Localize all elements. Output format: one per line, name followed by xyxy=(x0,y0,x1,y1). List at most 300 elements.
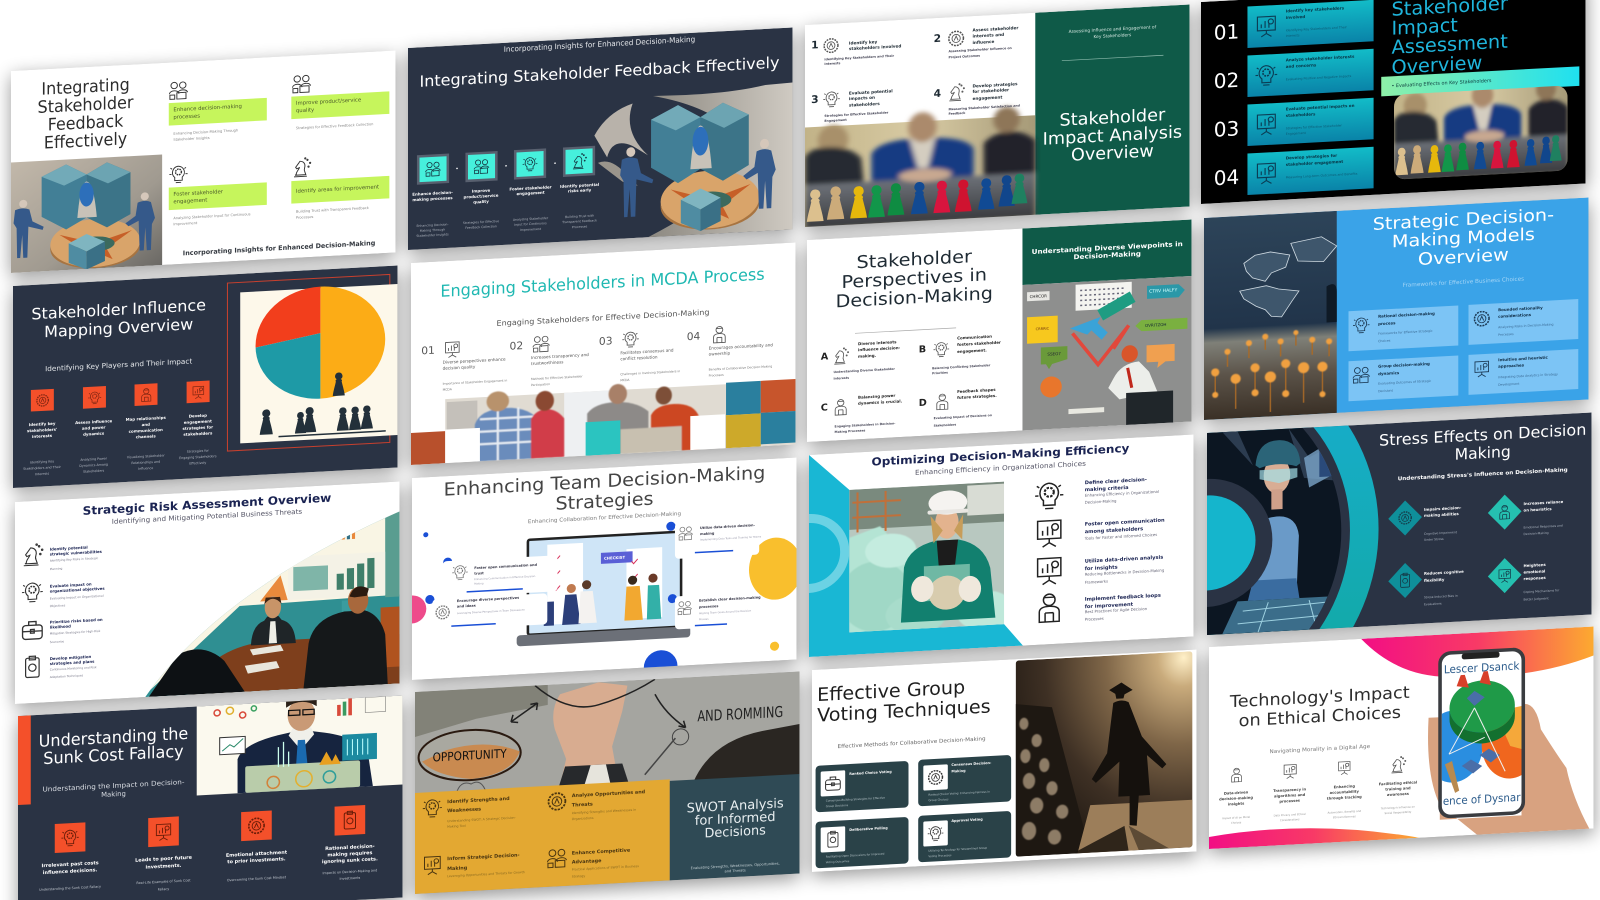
title xyxy=(1379,420,1586,468)
descriptions: Stakeholder Insights xyxy=(416,232,449,238)
card bounded: Analyzing Risks in Decision-Making xyxy=(1498,322,1553,329)
card 3 xyxy=(1247,98,1374,146)
card bounded: considerations xyxy=(1498,312,1532,319)
step 03: conflict resolution xyxy=(620,354,658,361)
card: irrelevant past costs xyxy=(39,822,101,892)
item: strengths: Understanding SWOT: A Strategic Decision- xyxy=(447,816,516,823)
card: deliberative polling: Voting Outcomes xyxy=(826,859,850,864)
title xyxy=(836,246,993,312)
title: Technology's Impact xyxy=(1229,683,1410,711)
title xyxy=(1044,108,1182,161)
card: improve quality: Improve product/service xyxy=(296,97,361,107)
descriptions: Enhancing Decision- xyxy=(416,222,449,228)
card: ranked choice: Group Decisions xyxy=(826,803,849,808)
card 1: involved xyxy=(1286,14,1305,20)
callout: establish clear processes: Process xyxy=(699,617,709,621)
subtitle bar xyxy=(1381,66,1579,96)
item: data-driven: decision-making xyxy=(1219,796,1253,801)
card: deliberative polling: Facilitating Open Discussions for Improved xyxy=(826,852,885,859)
item: increases: on heuristics xyxy=(1524,506,1552,513)
step 03 xyxy=(599,330,680,383)
image: chalkboard collage: CRRRIC xyxy=(1036,327,1050,331)
footer: Incorporating Insights for Enhanced Decision-Making xyxy=(183,239,376,257)
descriptions: Feedback Collection xyxy=(465,224,497,230)
labels: quality xyxy=(473,199,489,204)
item 1: Enhancing Efficiency in Organizational xyxy=(1085,489,1159,498)
card: deliberative polling xyxy=(816,817,909,868)
item 4: engagement xyxy=(972,95,1002,101)
item 4: Develop strategies xyxy=(972,81,1018,89)
labels: product/service xyxy=(464,193,499,200)
item D: D xyxy=(919,398,927,409)
item: accountability: accountability xyxy=(1330,790,1360,795)
card: emotional attachment: Overcoming the Sunk Cost Mindset xyxy=(227,875,287,882)
card: poor future investments xyxy=(135,816,193,893)
subtitle bar: • Evaluating Effects on Key Stakeholders xyxy=(1391,78,1492,89)
item: strengths: Identify Strengths and xyxy=(447,796,510,805)
card 4: stakeholder engagement xyxy=(1286,159,1343,167)
item 2: Tools for Faster and Informed Choices xyxy=(1084,532,1157,541)
card: approval voting: Approval Voting xyxy=(951,817,983,823)
item: advantage: Advantage xyxy=(572,858,602,866)
icon: thumbs xyxy=(294,157,311,177)
item 1: Identifying Key Risks in Strategic xyxy=(50,556,99,563)
card: enhance decision-making xyxy=(169,98,267,142)
step 03: Facilitates consensus and xyxy=(620,348,674,355)
callout: encourage diverse perspectives: Encourage diverse perspectives xyxy=(457,596,519,603)
callout: utilize data-driven: Implementing Data Tools and Training for Teams xyxy=(700,534,762,542)
callout: establish clear processes xyxy=(668,589,761,630)
title: Stakeholder xyxy=(38,93,134,118)
title: Impact xyxy=(1391,13,1458,40)
card group: Evaluating Outcomes of Strategic xyxy=(1378,379,1431,386)
item: heightens: Better Judgment xyxy=(1524,596,1549,602)
item 1 xyxy=(812,38,902,65)
item: training: training and xyxy=(1385,786,1411,792)
panel: SWOT Analysis for Informed Decisions xyxy=(415,672,799,894)
card: emotional attachment: Emotional attachment xyxy=(226,850,288,859)
item C: Balancing power xyxy=(858,393,895,400)
title: Overview xyxy=(1391,51,1482,79)
item: training: Facilitating ethical xyxy=(1379,780,1417,786)
card bounded: Processes xyxy=(1498,332,1514,337)
card 2: and concerns xyxy=(1286,62,1317,69)
labels: Identify key xyxy=(29,421,56,427)
step 04: Benefits of Collaborative Decision-Making xyxy=(709,364,772,372)
item 3 xyxy=(811,88,893,124)
image: chalkboard collage: CTRV HALFY xyxy=(1149,287,1177,295)
card: foster engagement: Analyzing Stakeholder Input for Continuous xyxy=(173,212,251,220)
title: Sunk Cost Fallacy xyxy=(43,742,184,768)
title: Enhancing Team Decision-Making xyxy=(444,463,765,501)
item 2: Foster open communication xyxy=(1085,518,1165,528)
card: foster engagement: Improvement xyxy=(173,221,198,226)
descriptions: Analyzing Stakeholder xyxy=(513,216,549,222)
item: opportunities: Threats xyxy=(572,802,593,809)
item: accountability: Enhancing xyxy=(1334,784,1355,789)
card: consensus: Ranked Choice Voting: Enhancing Fairness in xyxy=(928,790,990,797)
descriptions xyxy=(416,213,597,238)
card: enhance decision-making: Stakeholder Insights xyxy=(173,136,210,142)
card intuitive: Integrating Data Analytics in Strategy xyxy=(1498,372,1558,379)
item: heightens: Coping Mechanisms for xyxy=(1524,588,1560,594)
subtitle: Enhancing Collaboration for Effective Decision-Making xyxy=(528,511,681,525)
item: heightens xyxy=(1488,555,1560,604)
labels: Improve xyxy=(472,188,491,194)
item: accountability xyxy=(1327,761,1362,820)
panel: Engaging Stakeholders in MCDA Process xyxy=(411,243,795,465)
item: opportunities xyxy=(549,788,646,822)
card intuitive: Development xyxy=(1498,382,1520,387)
card: irrelevant past costs: influence decisions. xyxy=(43,867,98,876)
item: increases: Emotional Responses and xyxy=(1524,524,1563,530)
item 2: Assess stakeholder xyxy=(972,25,1019,33)
item A xyxy=(821,339,901,381)
numbers: 03 xyxy=(1214,117,1239,142)
item 3: impacts on xyxy=(849,95,875,101)
descriptions: Dynamics Among xyxy=(79,462,108,468)
title: Assessment xyxy=(1391,30,1508,59)
labels: strategies for xyxy=(183,424,213,431)
image: woman with visor in arcs xyxy=(969,328,1379,751)
step 04: Processes xyxy=(709,373,724,378)
labels: stakeholders' xyxy=(27,427,57,433)
gradient bottom shape xyxy=(1209,822,1419,849)
step 02: trustworthiness xyxy=(531,359,563,366)
item: advantage: Enhance Competitive xyxy=(572,848,631,857)
card: rational decision-making xyxy=(322,804,378,882)
card 3: Strategies for Effective Stakeholder xyxy=(1286,123,1343,130)
item: increases xyxy=(1488,492,1564,538)
item A: A xyxy=(821,351,829,363)
descriptions: Identifying Key xyxy=(30,459,54,465)
item D xyxy=(919,387,997,429)
card: ranked choice: Consensus-Building Strategies for Effective xyxy=(826,796,885,803)
title xyxy=(1229,683,1410,731)
numbers: 01 xyxy=(1214,20,1239,45)
item 4 xyxy=(934,80,1020,117)
numbers: 02 xyxy=(1214,68,1239,93)
callout: utilize data-driven: Utilize data-driven decision- xyxy=(700,523,756,530)
card: enhance decision-making: Enhancing Decision-Making Through xyxy=(173,128,238,136)
item 3: 3 xyxy=(811,93,819,106)
item: accountability: Ethical Dilemmas xyxy=(1333,814,1356,819)
item 1: stakeholders involved xyxy=(849,43,901,51)
callout: foster open communication: trust xyxy=(474,571,484,576)
card: ranked choice: Ranked Choice Voting xyxy=(849,770,892,776)
item: reduces: Reduces cognitive xyxy=(1424,569,1464,576)
card group: Decisions xyxy=(1378,388,1394,393)
item: reduces: Stress-Induced Bias in xyxy=(1424,594,1458,599)
card 4 xyxy=(1247,147,1374,195)
item: transparency: processes xyxy=(1279,799,1300,804)
item: data-driven: insights xyxy=(1228,802,1244,806)
panel: Optimizing Decision-Making Efficiency xyxy=(773,435,1193,659)
card 2: Analyze stakeholder interests xyxy=(1286,54,1355,62)
card: foster engagement: engagement xyxy=(173,198,207,205)
image: businessman with data graphics xyxy=(197,694,402,795)
subtitle: Key Stakeholders xyxy=(1094,32,1132,40)
item: reduces xyxy=(1388,560,1464,608)
title: Strategic Risk Assessment Overview xyxy=(83,491,332,518)
item 3: Frameworks xyxy=(1085,579,1108,585)
item C: Making Processes xyxy=(835,428,866,434)
labels: Enhance decision- xyxy=(412,190,453,197)
card 1: Interests xyxy=(1286,33,1300,38)
card 4: Develop strategies for xyxy=(1286,153,1337,160)
item: transparency: algorithms and xyxy=(1274,793,1306,799)
step 04: Encourages accountability and xyxy=(709,342,773,351)
item: data-driven: Data-driven xyxy=(1224,790,1249,796)
card intuitive: Intuitive and heuristic xyxy=(1498,355,1549,362)
card: approval voting: Voting Processes xyxy=(928,853,952,858)
card: foster engagement: Foster stakeholder xyxy=(173,189,224,198)
title: Decision-Making xyxy=(836,284,993,312)
item: transparency: Considerations xyxy=(1280,817,1300,822)
subtitle: Assessing Influence and Engagement of xyxy=(1069,24,1157,35)
title xyxy=(687,796,784,842)
card 3: Engagement xyxy=(1286,131,1307,136)
item 3: Prioritize risks based on xyxy=(50,617,103,625)
icon: gear bulb xyxy=(169,166,188,183)
card: identify areas xyxy=(291,176,389,220)
item 3: Mitigation Strategies for High-Risk xyxy=(50,629,101,636)
card: approval voting xyxy=(918,811,1011,862)
step 03: Challenges in Involving Stakeholders in xyxy=(620,369,680,376)
title xyxy=(39,724,188,768)
item B: engagement. xyxy=(957,347,987,354)
item D: Feedback shapes xyxy=(957,387,996,394)
item 1: Identify key xyxy=(849,39,878,46)
item 2 xyxy=(934,25,1019,60)
descriptions: Stakeholders xyxy=(83,469,105,474)
card: deliberative polling: Deliberative Polling xyxy=(849,826,888,832)
descriptions: Making Through xyxy=(420,228,445,233)
item: data-driven xyxy=(1219,767,1253,825)
title: Impact Analysis xyxy=(1043,123,1182,150)
dark panel xyxy=(670,774,799,880)
item 4: 4 xyxy=(934,87,941,100)
card: poor future investments: investments. xyxy=(146,863,182,871)
step 02: Participation xyxy=(531,382,550,387)
card intuitive: approaches xyxy=(1498,362,1525,369)
item 2 xyxy=(1038,515,1165,547)
callout: foster open communication: Making xyxy=(474,581,484,586)
item: opportunities: Organizations xyxy=(572,816,594,821)
item: inform: Leveraging Opportunities and Threats for Growth xyxy=(447,870,525,878)
item: training: Technology's Influence on xyxy=(1381,805,1415,810)
callout: foster open communication: Enhancing Communication in Effective Decision- xyxy=(474,574,536,581)
item D: future strategies. xyxy=(957,393,997,400)
item 2: Evaluating Impact on Organizational xyxy=(50,594,104,601)
item: accountability: Automation, Benefits and xyxy=(1328,809,1361,815)
card: rational decision-making: making requires xyxy=(327,850,373,858)
item 4: Measuring Stakeholder Satisfaction and xyxy=(948,104,1020,111)
card: poor future investments: Leads to poor future xyxy=(135,855,193,864)
card bounded: Bounded rationality xyxy=(1498,305,1543,312)
image: stakeholders around cube xyxy=(11,154,162,274)
item A: making. xyxy=(858,353,877,359)
title: Mapping Overview xyxy=(44,314,193,341)
panel: Strategic Decision-Making Models Overview xyxy=(1204,198,1588,420)
card group: Group decision-making xyxy=(1378,361,1430,369)
illustration: laptop with checklists: CHECKIST xyxy=(604,555,626,561)
item 4: Feedback xyxy=(948,111,966,116)
image: chalkboard collage: OVRITZOH xyxy=(1145,322,1167,328)
panel: Strategic Risk Assessment Overview xyxy=(15,482,399,704)
title: Integrating xyxy=(41,75,130,100)
descriptions: Engaging Stakeholders xyxy=(179,454,217,460)
teal frame shape xyxy=(773,444,1023,659)
item 4: Best Practices for Agile Decision xyxy=(1085,606,1148,614)
item 4 xyxy=(1039,588,1161,624)
card: enhance decision-making: Enhance decision-making xyxy=(173,104,242,113)
image: hand drawing opportunity xyxy=(415,672,799,797)
descriptions: Interests xyxy=(35,472,50,476)
title: Integrating Stakeholder Feedback Effectively xyxy=(419,53,779,91)
panel: Stakeholder Influence Mapping Overview xyxy=(13,266,397,488)
item D: Stakeholders xyxy=(934,423,956,428)
subtitle: Identifying Key Players and Their Impact xyxy=(45,356,192,373)
green header xyxy=(1022,220,1191,285)
descriptions: Processes xyxy=(572,224,588,229)
image: team around table xyxy=(411,375,795,465)
labels: dynamics xyxy=(83,431,105,437)
item 1: Define clear decision- xyxy=(1085,477,1147,486)
subtitle: Effective Methods for Collaborative Decision-Making xyxy=(838,736,986,750)
item 4: Adaptation Techniques xyxy=(50,673,84,679)
subtitle: Evaluating Strengths, Weaknesses, Opportunities, xyxy=(691,862,780,870)
title: Stakeholder Influence xyxy=(31,295,206,323)
labels xyxy=(412,182,599,204)
title: Overview xyxy=(1418,245,1509,270)
step 01: decision quality xyxy=(443,364,476,371)
card rational: Rational decision-making xyxy=(1378,311,1435,319)
numbers xyxy=(1215,24,1238,186)
item: advantage: Practical Applications of SWOT in Business xyxy=(572,864,639,872)
item: data-driven: Impact of AI on Moral xyxy=(1222,815,1250,820)
panel: Integrating Stakeholder Feedback Effectively (white) xyxy=(11,51,395,273)
image: hand drawing opportunity: AND ROMMING xyxy=(697,703,783,725)
gradient top shape xyxy=(1361,627,1593,683)
card 1: Identifying Key Stakeholders and Their xyxy=(1286,25,1348,32)
card bounded xyxy=(1468,299,1578,345)
step 04 xyxy=(687,324,773,379)
item C: Engaging Stakeholders in Decision- xyxy=(835,421,896,429)
card: consensus: Making xyxy=(951,769,966,774)
callout: establish clear processes: Aligning Team Goals Around the Decision xyxy=(699,608,752,615)
item 3: Evaluate potential xyxy=(849,88,893,96)
item B xyxy=(919,333,1001,376)
panel: Stakeholder Impact Analysis Overview xyxy=(805,5,1189,230)
descriptions: Input for Continuous xyxy=(514,221,547,227)
item 1: Identify potential xyxy=(50,545,88,552)
image: worker sorting plastic xyxy=(840,481,1014,638)
title: Voting Techniques xyxy=(817,697,991,727)
card 1: Identify key stakeholders xyxy=(1286,5,1345,13)
item 2 xyxy=(22,579,105,610)
image: world map and lights xyxy=(1204,211,1337,420)
card: identify areas: Building Trust with Transparent Feedback xyxy=(296,206,370,214)
labels: engagement xyxy=(184,418,212,425)
step 02: 02 xyxy=(510,339,523,353)
title: Overview xyxy=(1071,142,1154,166)
item 1: Decision-Making xyxy=(1085,498,1117,505)
card 2: Evaluating Positive and Negative Impacts xyxy=(1286,74,1352,81)
item: transparency xyxy=(1273,764,1307,823)
descriptions: Influence xyxy=(138,466,153,471)
item 4: Implement feedback loops xyxy=(1085,593,1161,603)
labels: risks early xyxy=(568,187,592,193)
labels: and xyxy=(142,422,150,427)
card intuitive xyxy=(1468,349,1578,395)
item: inform: Making xyxy=(447,865,468,872)
item 4 xyxy=(26,653,97,680)
labels: communication xyxy=(129,427,163,434)
subtitle: Incorporating Insights for Enhanced Decision-Making xyxy=(504,35,695,54)
descriptions: Improvement xyxy=(520,227,542,232)
item B: Priorities xyxy=(932,371,948,375)
item 4: strategies and plans xyxy=(50,659,95,666)
subtitle xyxy=(1068,25,1156,39)
illustration: laptop with checklists xyxy=(517,531,690,646)
item 3: Utilize data-driven analysis xyxy=(1085,555,1163,565)
item 4: Continuous Monitoring and Risk xyxy=(50,665,97,672)
descriptions: Stakeholders and Their xyxy=(23,465,62,471)
item C xyxy=(821,392,903,435)
descriptions: Strategies for xyxy=(187,449,210,454)
card: consensus: Consensus Decision- xyxy=(951,761,992,767)
item: impairs: Cognitive Impairment xyxy=(1424,530,1458,536)
card: emotional attachment: to prior investments. xyxy=(227,856,286,865)
title: Effective Group xyxy=(817,677,965,706)
icon squares xyxy=(31,381,210,412)
item 1: strategic vulnerabilities xyxy=(50,549,103,557)
title xyxy=(1373,205,1554,272)
title xyxy=(38,78,134,148)
item: strengths xyxy=(423,795,516,830)
step 01: 01 xyxy=(421,344,435,357)
image: meeting with pawns xyxy=(805,105,1035,230)
image: cube on swoosh xyxy=(594,83,792,240)
panel: Effective Group Voting Techniques xyxy=(812,650,1196,872)
title: Understanding the xyxy=(39,724,188,751)
item A: influence decision- xyxy=(858,345,901,352)
image: boardroom in curved frame xyxy=(143,507,399,697)
callout: establish clear processes: Establish clear decision-making xyxy=(699,595,761,603)
subtitle: Navigating Morality in a Digital Age xyxy=(1270,744,1370,755)
item: impairs: making abilities xyxy=(1424,511,1460,518)
item 1 xyxy=(1035,476,1159,509)
labels: Identify potential xyxy=(560,182,600,189)
panel: Stakeholder Impact Assessment Overview xyxy=(1201,0,1585,204)
item: heightens: emotional xyxy=(1524,569,1545,575)
descriptions: Transparent Feedback xyxy=(561,218,597,224)
title: Engaging Stakeholders in MCDA Process xyxy=(440,265,765,301)
descriptions: Relationships and xyxy=(131,460,160,465)
subtitle: Understanding the Impact on Decision- xyxy=(43,778,185,794)
subtitle: Enhancing Efficiency in Organizational Choices xyxy=(915,460,1086,477)
item 1: Interests xyxy=(824,61,841,66)
item: increases: Decision-Making xyxy=(1524,531,1549,536)
panel: Integrating Stakeholder Feedback (dark) xyxy=(408,28,792,250)
subtitle: Understanding Stress's Influence on Decision-Making xyxy=(1398,467,1568,482)
image: hand holding phone xyxy=(1423,644,1589,838)
title: Optimizing Decision-Making Efficiency xyxy=(872,442,1130,469)
item: increases: Increases reliance xyxy=(1524,499,1564,506)
title: SWOT Analysis xyxy=(687,796,784,816)
card: rational decision-making: Impacts on Decision-Making and xyxy=(323,868,377,875)
